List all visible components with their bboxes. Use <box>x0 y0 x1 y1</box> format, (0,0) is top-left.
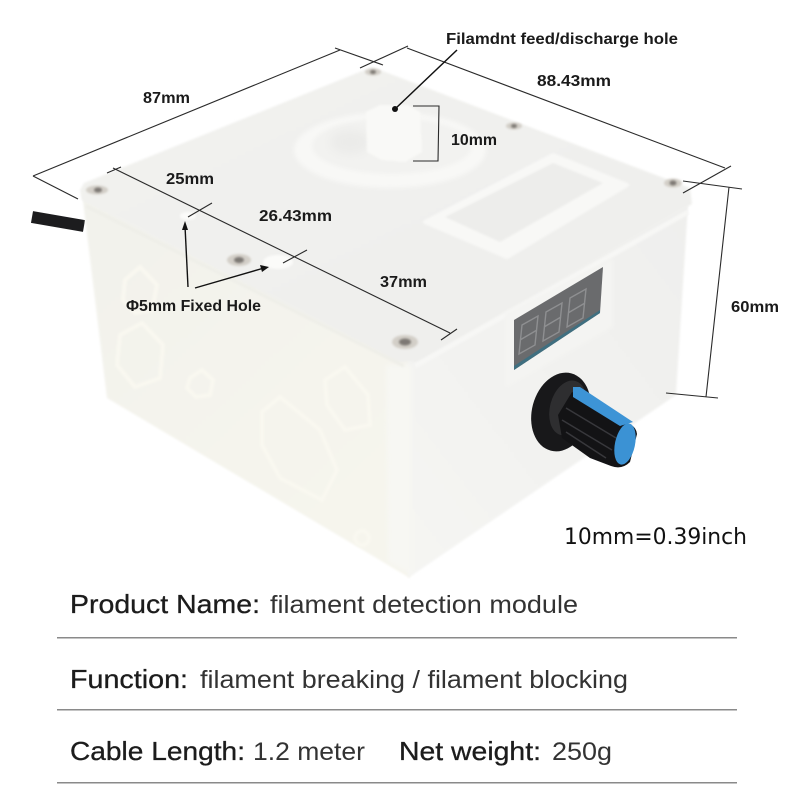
callout: 5mm fixed hole with arrows: Φ5mm Fixed Hole <box>126 298 261 315</box>
dimension: 10mm post height <box>413 106 497 161</box>
callout: filament feed/discharge hole: Filamdnt feed/discharge hole <box>446 31 678 48</box>
spec row: function <box>70 664 628 694</box>
recessed ring interior <box>312 118 472 174</box>
front corner highlight <box>386 365 412 575</box>
spec row: function: Function: <box>70 664 188 694</box>
dimension: 60mm height: 60mm <box>731 299 779 316</box>
unit conversion note: 10mm=0.39inch <box>564 525 747 550</box>
corner screws <box>86 68 682 349</box>
lid lower edge shading on left <box>86 206 404 366</box>
spec row: cable length and net weight: 250g <box>552 738 612 766</box>
spec row: cable length and net weight <box>70 736 612 766</box>
callout: filament feed/discharge hole <box>392 31 678 112</box>
dimension: 60mm height <box>666 181 779 398</box>
LED display teal edge <box>514 310 600 370</box>
knob inner collar <box>543 376 593 440</box>
dimension: 10mm post height: 10mm <box>451 132 497 149</box>
LED display <box>514 267 603 370</box>
lid lower edge shading on right <box>415 212 688 366</box>
display surround <box>505 258 613 388</box>
raised ring around feed post <box>294 112 486 188</box>
mount notch right <box>263 255 293 269</box>
knob blue stripe <box>573 387 633 426</box>
box right face <box>406 205 688 578</box>
mount notch left <box>180 212 196 220</box>
display window inner panel <box>445 163 603 242</box>
spec row: cable length and net weight: 1.2 meter <box>253 738 365 766</box>
dimension: 25mm, 26.43mm, 37mm along edge <box>107 167 457 340</box>
callout: 5mm fixed hole with arrows <box>126 221 269 315</box>
knob grip ridges <box>562 408 616 458</box>
rotary knob <box>523 366 639 467</box>
dimension: 88.43mm: 88.43mm <box>537 73 611 90</box>
shadow beside post <box>330 130 370 154</box>
black cable <box>32 217 84 226</box>
spec row: cable length and net weight: Net weight: <box>399 736 541 766</box>
dimension: 25mm, 26.43mm, 37mm along edge: 26.43mm <box>259 208 332 225</box>
box left face <box>82 193 410 578</box>
filament feed post <box>366 105 422 162</box>
product photo: filament detection module <box>32 67 692 578</box>
spec row: product name <box>70 589 578 619</box>
dimension: 25mm, 26.43mm, 37mm along edge: 25mm <box>166 171 214 188</box>
spec row: product name: filament detection module <box>270 591 578 619</box>
dimension: 87mm <box>33 48 383 199</box>
spec row: cable length and net weight: Cable Length: <box>70 736 245 766</box>
dimension: 25mm, 26.43mm, 37mm along edge: 37mm <box>380 274 427 291</box>
display window frame on lid <box>425 155 627 257</box>
dimension: 88.43mm <box>360 46 731 193</box>
LED seven-segment digits <box>519 289 586 354</box>
knob washer <box>523 366 599 458</box>
knob blue cap <box>611 421 639 467</box>
hexagon texture on left face <box>117 267 370 545</box>
spec row: function: filament breaking / filament blocking <box>200 666 628 694</box>
spec row: product name: Product Name: <box>70 589 260 619</box>
dimension: 87mm: 87mm <box>143 90 190 107</box>
top face of lid <box>80 67 692 362</box>
knob body <box>558 392 637 467</box>
